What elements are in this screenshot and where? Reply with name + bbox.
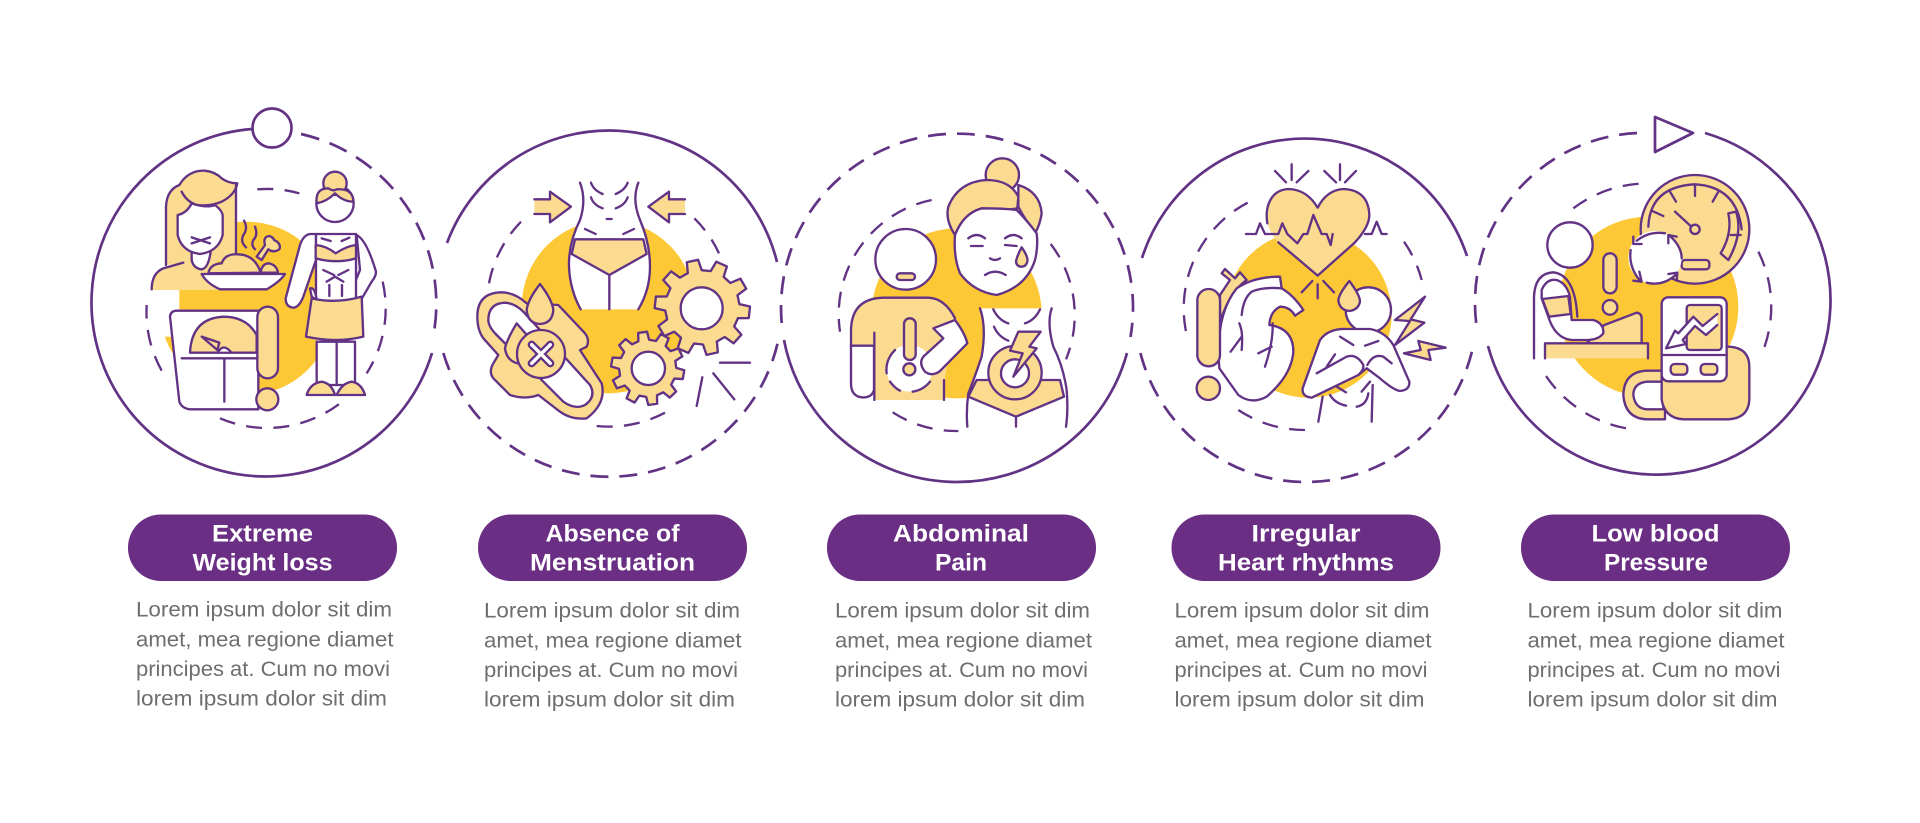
title pill: Absence of — [546, 520, 681, 548]
title pill — [1521, 514, 1790, 581]
title pill: Heart rhythms — [1218, 550, 1394, 576]
title pill — [478, 514, 747, 581]
title pill: Low blood — [1592, 520, 1720, 548]
icon: heart, ECG and chest pain — [1184, 164, 1446, 430]
description: principes at. Cum no movi — [1174, 659, 1428, 682]
outer ring — [781, 134, 1133, 482]
title pill: Extreme — [212, 520, 313, 548]
outer ring with start node — [91, 108, 436, 476]
description: principes at. Cum no movi — [484, 659, 738, 682]
title pill: Pain — [935, 550, 987, 576]
outer ring — [443, 131, 778, 477]
description: principes at. Cum no movi — [136, 658, 390, 681]
description — [835, 600, 1092, 712]
description: lorem ipsum dolor sit dim — [1528, 688, 1778, 712]
description: lorem ipsum dolor sit dim — [835, 688, 1085, 712]
description: amet, mea regione diamet — [136, 628, 394, 652]
description: lorem ipsum dolor sit dim — [1174, 688, 1424, 712]
title pill — [128, 514, 397, 581]
title pill — [827, 514, 1096, 581]
description: Lorem ipsum dolor sit dim — [136, 598, 392, 622]
icon: waist, pad and gears — [477, 182, 754, 427]
description: principes at. Cum no movi — [1528, 659, 1780, 682]
panel: irregular heart rhythms — [1140, 139, 1473, 711]
description — [136, 598, 394, 710]
description: amet, mea regione diamet — [1528, 630, 1785, 652]
title pill: Weight loss — [192, 550, 332, 576]
panel: absence of menstruation — [443, 131, 778, 711]
description: lorem ipsum dolor sit dim — [136, 688, 387, 710]
description: Lorem ipsum dolor sit dim — [1174, 600, 1430, 622]
title pill: Irregular — [1252, 520, 1360, 548]
panel: extreme weight loss — [91, 108, 436, 710]
title pill: Menstruation — [530, 550, 695, 576]
description: lorem ipsum dolor sit dim — [484, 688, 735, 712]
description: Lorem ipsum dolor sit dim — [1528, 600, 1782, 622]
title pill — [1172, 514, 1440, 581]
description — [1528, 600, 1785, 712]
outer ring with end arrow — [1475, 117, 1831, 475]
description: Lorem ipsum dolor sit dim — [484, 600, 740, 622]
panel: abdominal pain — [781, 134, 1133, 711]
title pill: Pressure — [1604, 550, 1708, 576]
title pill: Abdominal — [893, 520, 1029, 548]
description: principes at. Cum no movi — [835, 659, 1088, 682]
description: amet, mea regione diamet — [835, 630, 1092, 652]
description: amet, mea regione diamet — [1174, 630, 1432, 652]
outer ring — [1140, 139, 1473, 482]
description: Lorem ipsum dolor sit dim — [835, 600, 1090, 622]
panel: low blood pressure — [1475, 117, 1831, 712]
description — [1174, 600, 1432, 712]
icon: blood pressure monitor and gauge — [1534, 175, 1771, 429]
icon: woman refusing food, thin figure and scale — [140, 171, 393, 428]
description: amet, mea regione diamet — [484, 630, 742, 652]
icon: person and woman with abdominal pain — [839, 158, 1075, 431]
description — [484, 600, 742, 712]
